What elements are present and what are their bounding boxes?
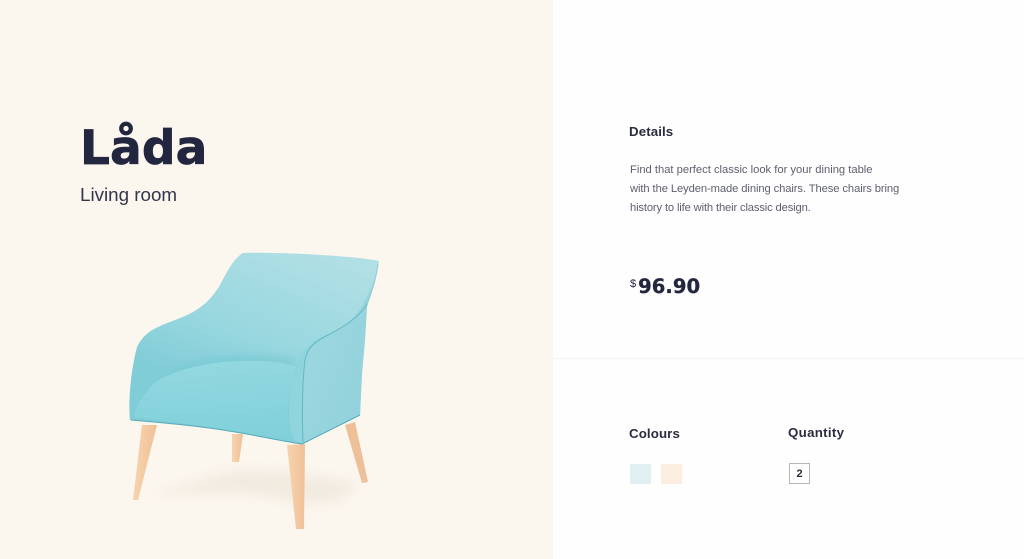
divider bbox=[553, 358, 1024, 359]
colour swatch: peach bbox=[661, 464, 682, 484]
subtitle: Living room bbox=[80, 184, 177, 205]
seat shadow bbox=[170, 354, 296, 380]
seat cushion bbox=[135, 361, 296, 442]
description text bbox=[630, 164, 899, 214]
arm front bbox=[289, 337, 322, 443]
description text: Find that perfect classic look for your dining table bbox=[630, 164, 873, 176]
description text: with the Leyden-made dining chairs. These chairs bring bbox=[630, 183, 899, 195]
illustration: teal armchair bbox=[129, 252, 379, 529]
details heading: Details bbox=[629, 124, 673, 139]
price: $96.90 bbox=[630, 275, 700, 298]
description text: history to life with their classic design. bbox=[630, 202, 811, 214]
chair body bbox=[129, 253, 379, 444]
quantity heading: Quantity bbox=[788, 425, 844, 440]
panel: product visual bbox=[0, 0, 553, 559]
colours heading: Colours bbox=[629, 426, 680, 441]
chair legs bbox=[133, 422, 368, 529]
floor shadow bbox=[150, 470, 360, 504]
quantity box: 2 bbox=[796, 468, 803, 480]
side panel bbox=[302, 266, 378, 443]
colour swatch: blue bbox=[630, 464, 651, 484]
panel: product details bbox=[553, 0, 1024, 559]
title: Låda bbox=[80, 121, 207, 176]
quantity box bbox=[789, 463, 810, 484]
piping bbox=[131, 415, 360, 444]
